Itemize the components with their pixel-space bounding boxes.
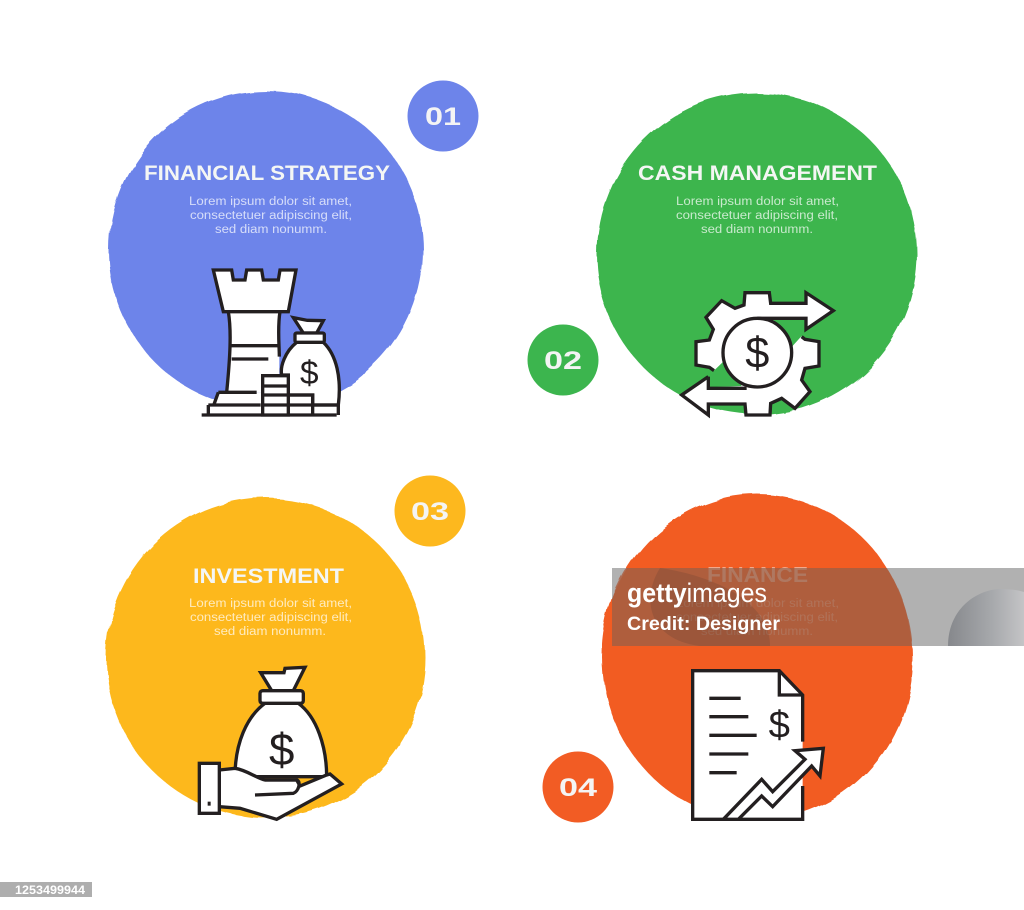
- text block: finance: sed diam nonumm.: [701, 626, 813, 638]
- text block: finance: Lorem ipsum dolor sit amet,: [676, 598, 839, 610]
- heading: cash management: CASH MANAGEMENT: [638, 162, 877, 185]
- text block: financial strategy: consectetuer adipiscing elit,: [190, 210, 352, 222]
- icon: document with growth arrow: $: [769, 704, 790, 747]
- panel: investment: [106, 476, 466, 819]
- icon: gear with dollar and arrows: [682, 293, 833, 415]
- heading: finance: FINANCE: [707, 564, 808, 587]
- text block: investment: Lorem ipsum dolor sit amet,: [189, 598, 352, 610]
- blob: orange background: [602, 494, 912, 820]
- blob: green background: [597, 93, 917, 415]
- blob: blue background: [109, 91, 423, 409]
- watermark: gettyimages wordmark: gettyimages: [627, 578, 767, 608]
- number badge 02: 02: [544, 347, 582, 375]
- watermark: credit line: Credit: Designer: [627, 614, 781, 635]
- number badge 04: 04: [559, 774, 597, 802]
- number badge 03: 03: [411, 498, 449, 526]
- image id tag: [0, 882, 92, 897]
- heading: investment: INVESTMENT: [193, 565, 344, 588]
- text block: finance: [676, 598, 839, 638]
- text block: financial strategy: [189, 196, 352, 236]
- text block: cash management: sed diam nonumm.: [701, 224, 813, 236]
- text block: investment: [189, 598, 352, 638]
- text block: financial strategy: sed diam nonumm.: [215, 224, 327, 236]
- icon: chess rook and money bag: $: [300, 355, 319, 392]
- icon: hand holding money bag: [199, 667, 342, 819]
- panel: finance: [542, 494, 912, 822]
- number badge 01: 01: [425, 103, 461, 131]
- text block: financial strategy: Lorem ipsum dolor sit amet,: [189, 196, 352, 208]
- text block: cash management: [676, 196, 839, 236]
- panel: cash management: [528, 93, 917, 415]
- watermark banner: [612, 568, 1024, 646]
- text block: investment: consectetuer adipiscing elit,: [190, 612, 352, 624]
- heading: financial strategy: FINANCIAL STRATEGY: [144, 162, 390, 185]
- number badge 03: [394, 476, 466, 546]
- text block: investment: sed diam nonumm.: [214, 626, 326, 638]
- blob: yellow background: [106, 498, 426, 818]
- panel: financial strategy: [109, 80, 478, 415]
- number badge 04: [542, 752, 614, 822]
- icon: gear with dollar and arrows: $: [745, 329, 769, 377]
- text block: finance: consectetuer adipiscing elit,: [676, 612, 838, 624]
- image id tag: 1253499944: [15, 883, 85, 897]
- icon: hand holding money bag: $: [269, 724, 294, 775]
- icon: document with growth arrow: [693, 671, 823, 819]
- number badge 02: [528, 324, 598, 396]
- text block: cash management: Lorem ipsum dolor sit amet,: [676, 196, 839, 208]
- text block: cash management: consectetuer adipiscing elit,: [676, 210, 838, 222]
- number badge 01: [408, 80, 478, 152]
- icon: chess rook and money bag: [202, 270, 339, 415]
